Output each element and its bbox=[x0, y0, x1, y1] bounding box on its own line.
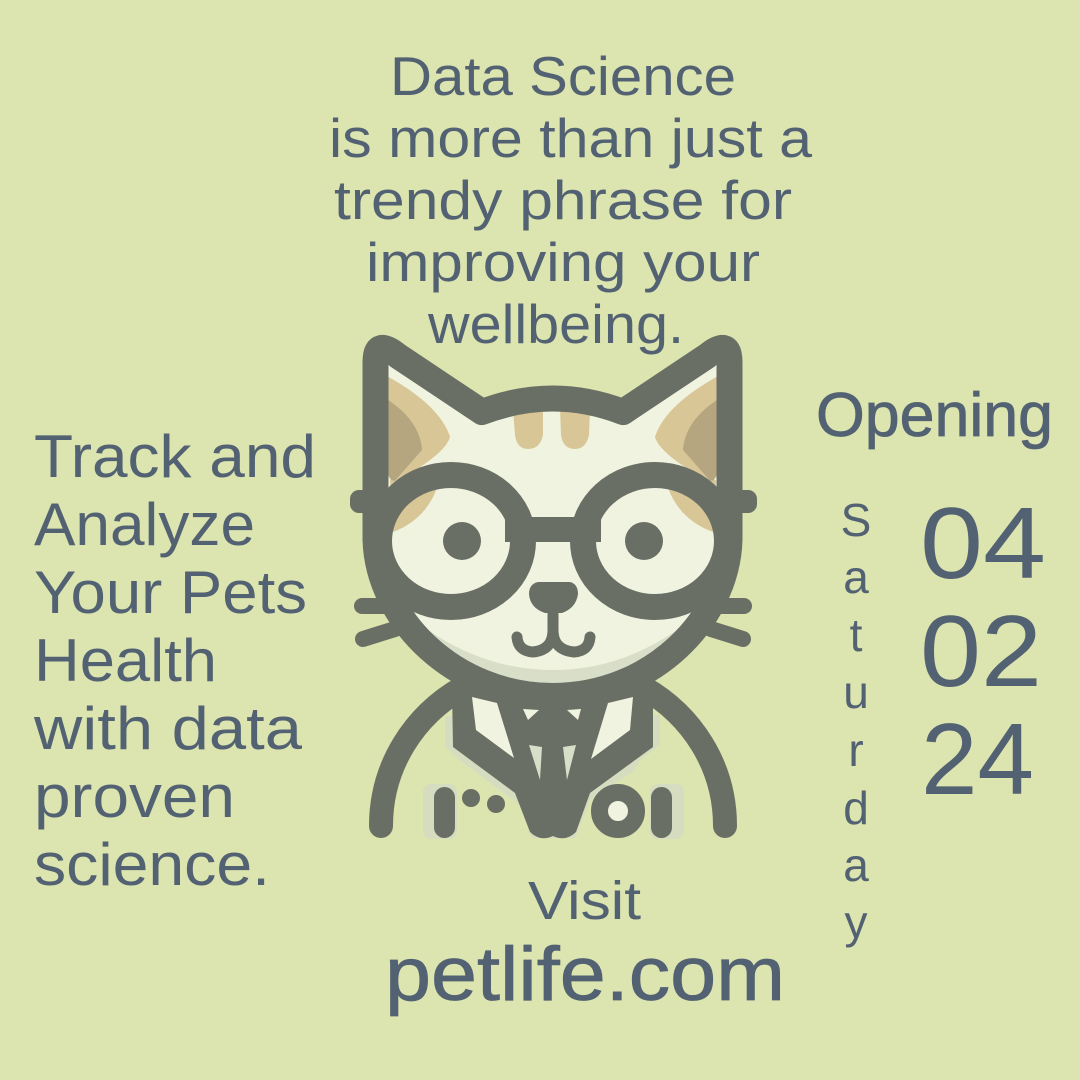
heading: data science statement bbox=[329, 45, 812, 355]
text: vertical Saturday: t bbox=[850, 609, 863, 661]
text: vertical Saturday: a bbox=[843, 551, 869, 603]
call to action: visit petlife.com: Visit bbox=[528, 871, 641, 931]
data icons on suit bbox=[423, 784, 684, 839]
date numbers: 02 bbox=[920, 596, 1042, 708]
text: vertical Saturday: S bbox=[841, 494, 871, 546]
heading: data science statement: Data Science bbox=[390, 45, 736, 107]
round glasses bbox=[350, 475, 757, 607]
text: vertical Saturday: y bbox=[844, 896, 868, 948]
heading: data science statement: is more than just a bbox=[329, 107, 812, 169]
text block: track and analyze: proven bbox=[34, 763, 235, 830]
text block: track and analyze: Your Pets bbox=[34, 559, 307, 626]
cat whiskers bbox=[362, 606, 744, 639]
text: vertical Saturday: d bbox=[843, 782, 869, 834]
text block: track and analyze: Health bbox=[34, 627, 217, 694]
heading: opening: Opening bbox=[816, 381, 1053, 450]
date numbers bbox=[920, 488, 1046, 816]
text: vertical Saturday bbox=[841, 494, 871, 948]
heading: data science statement: trendy phrase for bbox=[334, 169, 792, 231]
cat head bbox=[376, 345, 730, 710]
text block: track and analyze: Analyze bbox=[34, 491, 255, 558]
text: vertical Saturday: r bbox=[848, 724, 864, 776]
text: vertical Saturday: u bbox=[843, 666, 869, 718]
cat nose and smile bbox=[517, 582, 590, 652]
date numbers: 24 bbox=[921, 704, 1034, 816]
text block: track and analyze bbox=[33, 423, 316, 898]
text block: track and analyze: with data bbox=[33, 695, 303, 762]
text block: track and analyze: science. bbox=[34, 831, 270, 898]
heading: data science statement: improving your bbox=[366, 231, 760, 293]
call to action: visit petlife.com bbox=[385, 871, 785, 1017]
icon: cat with glasses bbox=[350, 345, 757, 839]
text block: track and analyze: Track and bbox=[34, 423, 316, 490]
heading: data science statement: wellbeing. bbox=[427, 293, 684, 355]
cat body and suit bbox=[381, 688, 725, 838]
call to action: visit petlife.com: petlife.com bbox=[385, 932, 785, 1017]
date numbers: 04 bbox=[920, 488, 1046, 600]
text: vertical Saturday: a bbox=[843, 839, 869, 891]
